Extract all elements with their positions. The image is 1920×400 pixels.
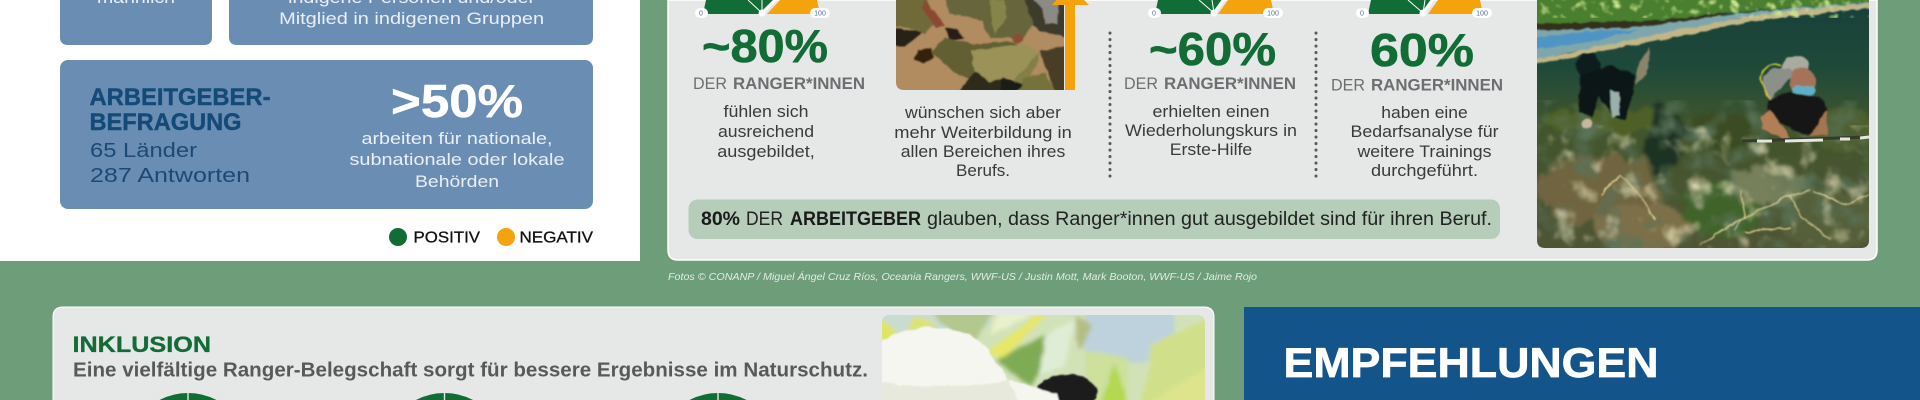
stat: 60 percent needs analysis: haben eine (1381, 103, 1468, 122)
photo: divers surveying reef (1530, 0, 1880, 252)
donut chart tops (159, 393, 747, 400)
legend: NEGATIV (520, 230, 593, 246)
stat: 60 percent refresher: ~60% (1149, 23, 1276, 75)
employer statistic (350, 75, 564, 191)
stat: 60 percent refresher: erhielten einen (1152, 102, 1270, 121)
stat: 80 percent trained: ausgebildet, (717, 142, 815, 161)
box: employer survey (60, 60, 593, 209)
stat: 60 percent needs analysis: weitere Trainings (1356, 142, 1492, 161)
employer statistic: arbeiten für nationale, (362, 129, 552, 148)
stat: 60 percent needs analysis (1331, 0, 1503, 180)
box: share male (60, 0, 212, 45)
panel: survey summary (0, 0, 640, 261)
stat: 80 percent trained: ~80% (702, 20, 828, 72)
stat: 60 percent refresher: RANGER*INNEN (1164, 75, 1296, 93)
employer statistic: Behörden (415, 172, 499, 191)
stat: 60 percent refresher (1124, 0, 1297, 159)
stat: 60 percent refresher: Wiederholungskurs in (1125, 121, 1297, 140)
photo: ranger with white cap (875, 310, 1210, 400)
stat: 60 percent needs analysis: durchgeführt. (1371, 161, 1478, 180)
photo credits: Fotos © CONANP / Miguel Ángel Cruz Ríos, Oceania Rangers, WWF-US / Justin Mott, Mark Booton, WWF-US / Jaime Rojo (668, 270, 1257, 283)
stat: 60 percent needs analysis: RANGER*INNEN (1371, 76, 1503, 94)
heading: inclusion: INKLUSION (72, 332, 211, 357)
stat: 80 percent trained (693, 0, 865, 161)
employer survey heading (90, 84, 271, 187)
callout: employers' view: DER (746, 209, 783, 230)
gauge: 60 percent (1356, 0, 1492, 18)
gauge: 60 percent: 100 (1476, 10, 1488, 18)
stat: 80 percent trained: RANGER*INNEN (733, 75, 865, 93)
employer statistic: subnationale oder lokale (350, 150, 564, 169)
stat: 80 percent trained: fühlen sich (724, 102, 808, 121)
heading: recommendations: EMPFEHLUNGEN (1284, 339, 1658, 386)
subheading: inclusion: Eine vielfältige Ranger-Belegschaft sorgt für bessere Ergebnisse im Naturschutz. (73, 358, 868, 382)
stat: 60 percent refresher: Erste-Hilfe (1170, 140, 1252, 159)
panel: inclusion (53, 307, 1214, 400)
arrow: wants more training (1052, 0, 1089, 90)
gauge: about 60 percent: 0 (1152, 10, 1156, 18)
gauge: 60 percent: 0 (1360, 10, 1364, 18)
texture: reef speckle (1537, 100, 1869, 248)
stat: 60 percent needs analysis: Bedarfsanalyse für (1350, 122, 1499, 141)
callout: employers' view: 80% (701, 209, 740, 230)
stat: 80 percent trained: DER (693, 75, 727, 93)
callout: employers' view (688, 200, 1500, 239)
callout: employers' view: glauben, dass Ranger*innen gut ausgebildet sind für ihren Beruf. (927, 209, 1492, 230)
measuring tape (1742, 137, 1869, 141)
text: more training wanted: allen Bereichen ihres (901, 142, 1065, 161)
employer survey heading: BEFRAGUNG (90, 109, 242, 136)
photo: rangers first aid training (896, 0, 1064, 90)
legend (389, 228, 593, 246)
employer survey heading: 287 Antworten (90, 165, 250, 187)
stat: 60 percent needs analysis: 60% (1370, 24, 1474, 76)
gauge: about 60 percent: 100 (1267, 10, 1279, 18)
gauge: about 80 percent (695, 0, 830, 18)
stat: 60 percent needs analysis: DER (1331, 76, 1365, 94)
stat: 60 percent refresher: DER (1124, 75, 1158, 93)
employer survey heading: 65 Länder (90, 140, 197, 162)
gauge: about 80 percent: 0 (699, 10, 703, 18)
panel: recommendations (1244, 307, 1920, 400)
box: indigenous share (229, 0, 593, 45)
mangrove and water surface (1530, 0, 1875, 65)
diver right (1760, 56, 1828, 140)
stat: 80 percent trained: ausreichend (718, 122, 814, 141)
callout: employers' view: ARBEITGEBER (790, 209, 921, 230)
panel: training (668, 0, 1880, 260)
text: more training wanted: Berufs. (956, 161, 1010, 180)
box: indigenous share: Mitglied in indigenen Gruppen (279, 9, 544, 28)
employer statistic: >50% (391, 75, 523, 127)
gauge: about 80 percent: 100 (814, 10, 826, 18)
text: more training wanted: mehr Weiterbildung in (894, 123, 1072, 142)
text: more training wanted: wünschen sich aber (904, 103, 1061, 122)
legend: POSITIV (414, 230, 480, 246)
text: more training wanted (894, 103, 1072, 180)
gauge: about 60 percent (1148, 0, 1283, 18)
diver left (1576, 48, 1650, 129)
employer survey heading: ARBEITGEBER- (90, 84, 271, 111)
